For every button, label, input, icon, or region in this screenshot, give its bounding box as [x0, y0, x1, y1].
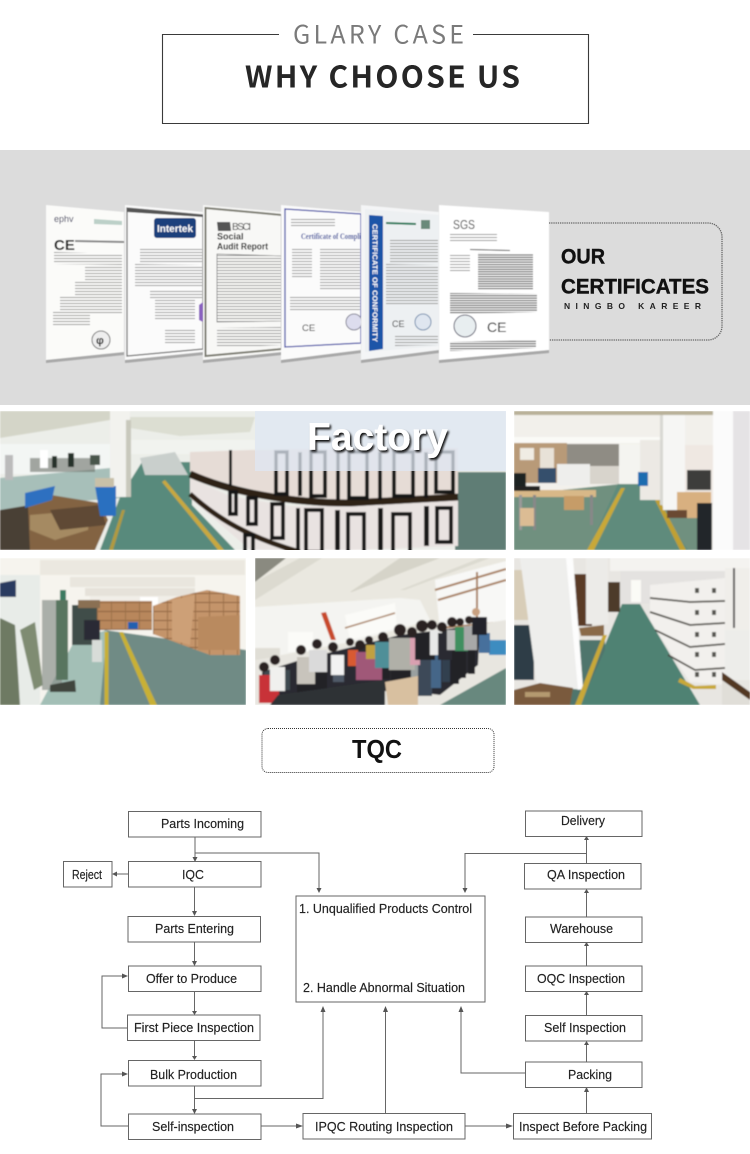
certificate: factory audit CE [46, 205, 124, 363]
step: reject [64, 862, 112, 887]
step: parts entering: Parts Entering [155, 922, 234, 936]
section heading: Glary Case, Why Choose Us [162, 16, 588, 124]
step: offer to produce: Offer to Produce [146, 972, 237, 986]
certificate: SGS: SGS [453, 217, 475, 232]
arrow: QA to delivery and control box [462, 836, 589, 893]
step: parts incoming [128, 812, 261, 837]
step: OQC inspection [526, 966, 642, 992]
step: delivery [526, 811, 642, 836]
photo: machines and cartons [0, 558, 246, 705]
step: first piece inspection [128, 1015, 260, 1040]
certificate: BSCI social audit report: BSCI [232, 222, 251, 233]
step: OQC inspection: OQC Inspection [537, 972, 625, 986]
certificate: Certificate of Compliance: Certificate of Compli [301, 232, 362, 241]
callout: our certificates label: OUR [561, 246, 605, 268]
step: parts incoming: Parts Incoming [161, 817, 244, 831]
control box: unqualified products and abnormal situations: 2. Handle Abnormal Situation [303, 981, 465, 995]
step: delivery: Delivery [561, 814, 606, 828]
arrow: first piece to bulk [192, 1040, 197, 1060]
certificate: Certificate of Conformity [361, 205, 439, 363]
certificate: factory audit CE: CE [54, 237, 75, 254]
step: inspect before packing: Inspect Before Packing [519, 1120, 647, 1134]
arrow: bulk to self-inspection and control box [192, 1006, 326, 1114]
section heading: Glary Case, Why Choose Us: WHY CHOOSE US [245, 52, 520, 96]
certificate: Certificate of Conformity: CE [392, 319, 405, 329]
certificate: Certificate of Compliance [281, 205, 362, 363]
callout: our certificates label: CERTIFICATES [561, 276, 709, 298]
callout: our certificates label [549, 223, 722, 340]
step: IPQC routing inspection [303, 1114, 465, 1139]
callout: our certificates label: NINGBO KAREER [564, 301, 701, 311]
arrow: IPQC to control box [383, 1006, 388, 1113]
step: IPQC routing inspection: IPQC Routing Inspection [315, 1120, 453, 1134]
certificate: BSCI social audit report: Social [217, 232, 244, 242]
arrow: packing to self inspection [584, 1041, 589, 1062]
step: first piece inspection: First Piece Inspection [134, 1021, 254, 1035]
arrow: inspect before packing to packing [584, 1087, 589, 1113]
arrow: IQC to parts entering [192, 887, 197, 916]
control box: unqualified products and abnormal situations: 1. Unqualified Products Control [299, 902, 472, 916]
arrow: IPQC to inspect before packing [465, 1124, 513, 1128]
arrow: self-inspection to IPQC [261, 1124, 303, 1128]
certificate: SGS [439, 205, 549, 363]
step: self-inspection: Self-inspection [152, 1120, 234, 1134]
heading: TQC: TQC [352, 734, 402, 764]
certificate: Intertek [125, 205, 203, 363]
step: QA inspection [524, 864, 641, 889]
vertical certificate title: CERTIFICATE OF CONFORMITY [370, 224, 380, 342]
control box: unqualified products and abnormal situations [296, 896, 485, 1002]
certificate: BSCI social audit report [203, 205, 282, 363]
arrow: OQC to warehouse [584, 942, 589, 966]
arrow: first piece loop back to offer [102, 974, 128, 1028]
arrow: IQC to reject [112, 872, 128, 876]
step: bulk production: Bulk Production [150, 1068, 237, 1082]
step: packing: Packing [568, 1068, 612, 1082]
section heading: Glary Case, Why Choose Us: GLARY CASE [293, 16, 464, 52]
photo: factory panorama with banner [0, 411, 506, 556]
panel: certificates band [0, 150, 750, 405]
certificate: Certificate of Compliance: CE [302, 323, 315, 334]
step: self-inspection [128, 1114, 261, 1140]
certificate: factory audit CE: φ [96, 335, 104, 347]
step: QA inspection: QA Inspection [547, 868, 625, 882]
step: inspect before packing [514, 1114, 652, 1139]
arrow: warehouse to QA [584, 889, 589, 917]
arrow: self inspection to OQC [584, 991, 589, 1015]
photo: aisle with stacked cases [514, 558, 750, 705]
step: offer to produce [128, 966, 261, 992]
step: self inspection: Self Inspection [544, 1021, 626, 1035]
step: bulk production [128, 1060, 261, 1086]
step: parts entering [128, 916, 260, 942]
step: packing [526, 1062, 642, 1088]
certificate: factory audit CE: ephv [54, 214, 74, 224]
heading: TQC [262, 728, 494, 772]
certificate: SGS: CE [487, 319, 506, 335]
arrow: parts incoming to IQC and control box [192, 837, 322, 893]
flow chart: TQC process [64, 811, 652, 1140]
arrow: offer to first piece [192, 991, 197, 1015]
certificate: Intertek: Intertek [157, 224, 193, 235]
arrow: packing to control box [458, 1006, 525, 1073]
factory banner overlay [255, 411, 506, 471]
step: warehouse: Warehouse [550, 922, 613, 936]
photo: staff group in workshop [255, 558, 506, 705]
arrow: self-inspection loop back to bulk [101, 1072, 128, 1126]
arrow: parts entering to offer [192, 942, 197, 966]
step: IQC [128, 862, 261, 887]
step: reject: Reject [72, 868, 102, 882]
factory title: Factory [307, 416, 448, 459]
step: warehouse [526, 917, 642, 942]
step: IQC: IQC [182, 868, 204, 882]
step: self inspection [526, 1016, 642, 1041]
certificate: BSCI social audit report: Audit Report [217, 242, 268, 252]
photo: workshop with work table [514, 411, 750, 550]
